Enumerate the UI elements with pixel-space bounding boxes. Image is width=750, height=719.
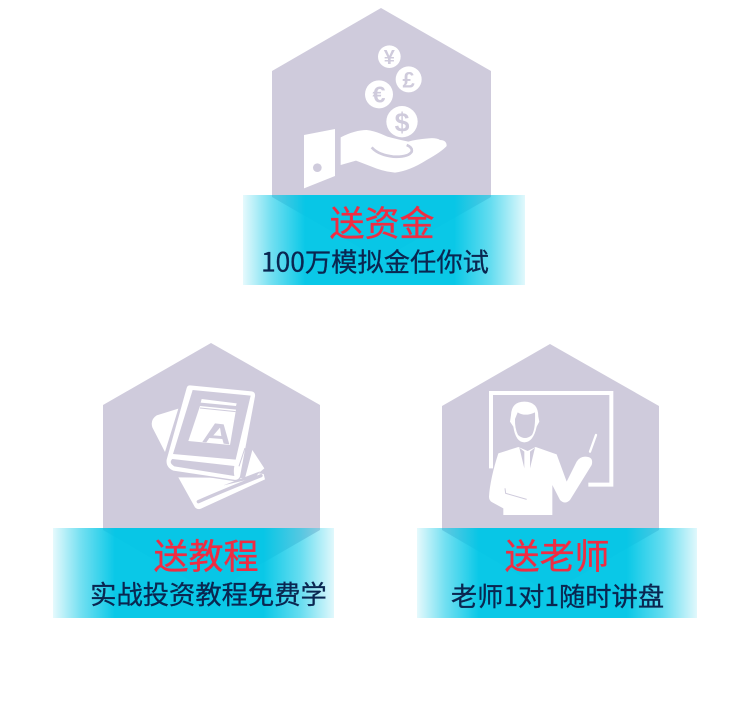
icon: open hand (341, 130, 447, 173)
hexagon: capital (272, 8, 491, 260)
icon: cover inset (173, 390, 251, 460)
icon: back book page line (198, 476, 261, 502)
icon: page strip (171, 459, 234, 476)
icon: cuff (304, 129, 335, 188)
icon: label rule (200, 408, 236, 412)
icon: teacher at board (489, 393, 611, 515)
band: capital (243, 195, 525, 285)
icon: pointer (590, 435, 596, 452)
heading: capital: 送资金 (329, 196, 435, 247)
icon: yen coin (378, 45, 401, 69)
icon: euro coin: € (373, 82, 386, 108)
panel: free capital (243, 8, 525, 285)
text: capital subtitle: 100万模拟金任你试 (261, 240, 489, 280)
icon: shirt wedges beside tie (519, 448, 535, 468)
icon: pound coin (396, 66, 422, 92)
panel: free tutorials (53, 343, 334, 618)
icon: letter A (202, 423, 229, 444)
panel: free teacher (417, 344, 697, 618)
icon: lavender wedge above page line (223, 471, 260, 485)
icon: euro coin (365, 80, 393, 108)
hexagon: teacher (442, 344, 659, 593)
icon: books (152, 385, 265, 509)
text: teacher subtitle: 老师1对1随时讲盘 (451, 575, 664, 614)
icon: label (188, 399, 237, 445)
icon: body (489, 447, 592, 515)
band: tutorials (53, 528, 334, 618)
band: teacher (417, 528, 697, 618)
heading: teacher: 送老师 (504, 529, 610, 580)
icon: hand with coins (304, 45, 447, 188)
text: tutorials subtitle: 实战投资教程免费学 (90, 573, 327, 612)
icon: pound coin: £ (403, 67, 415, 92)
icon: yen coin: ¥ (384, 47, 396, 69)
icon: gap around front book (167, 385, 255, 480)
heading: tutorials: 送教程 (153, 529, 259, 580)
icon: dollar coin (386, 106, 418, 137)
icon: spine sliver (239, 448, 245, 466)
hexagon: tutorials (103, 343, 320, 593)
icon: back book (152, 409, 265, 509)
icon: arm crease (505, 488, 527, 499)
icon: dollar coin: $ (395, 107, 410, 137)
icon: head (510, 402, 539, 442)
icon: board frame (491, 393, 611, 485)
icon: front book (167, 385, 255, 480)
